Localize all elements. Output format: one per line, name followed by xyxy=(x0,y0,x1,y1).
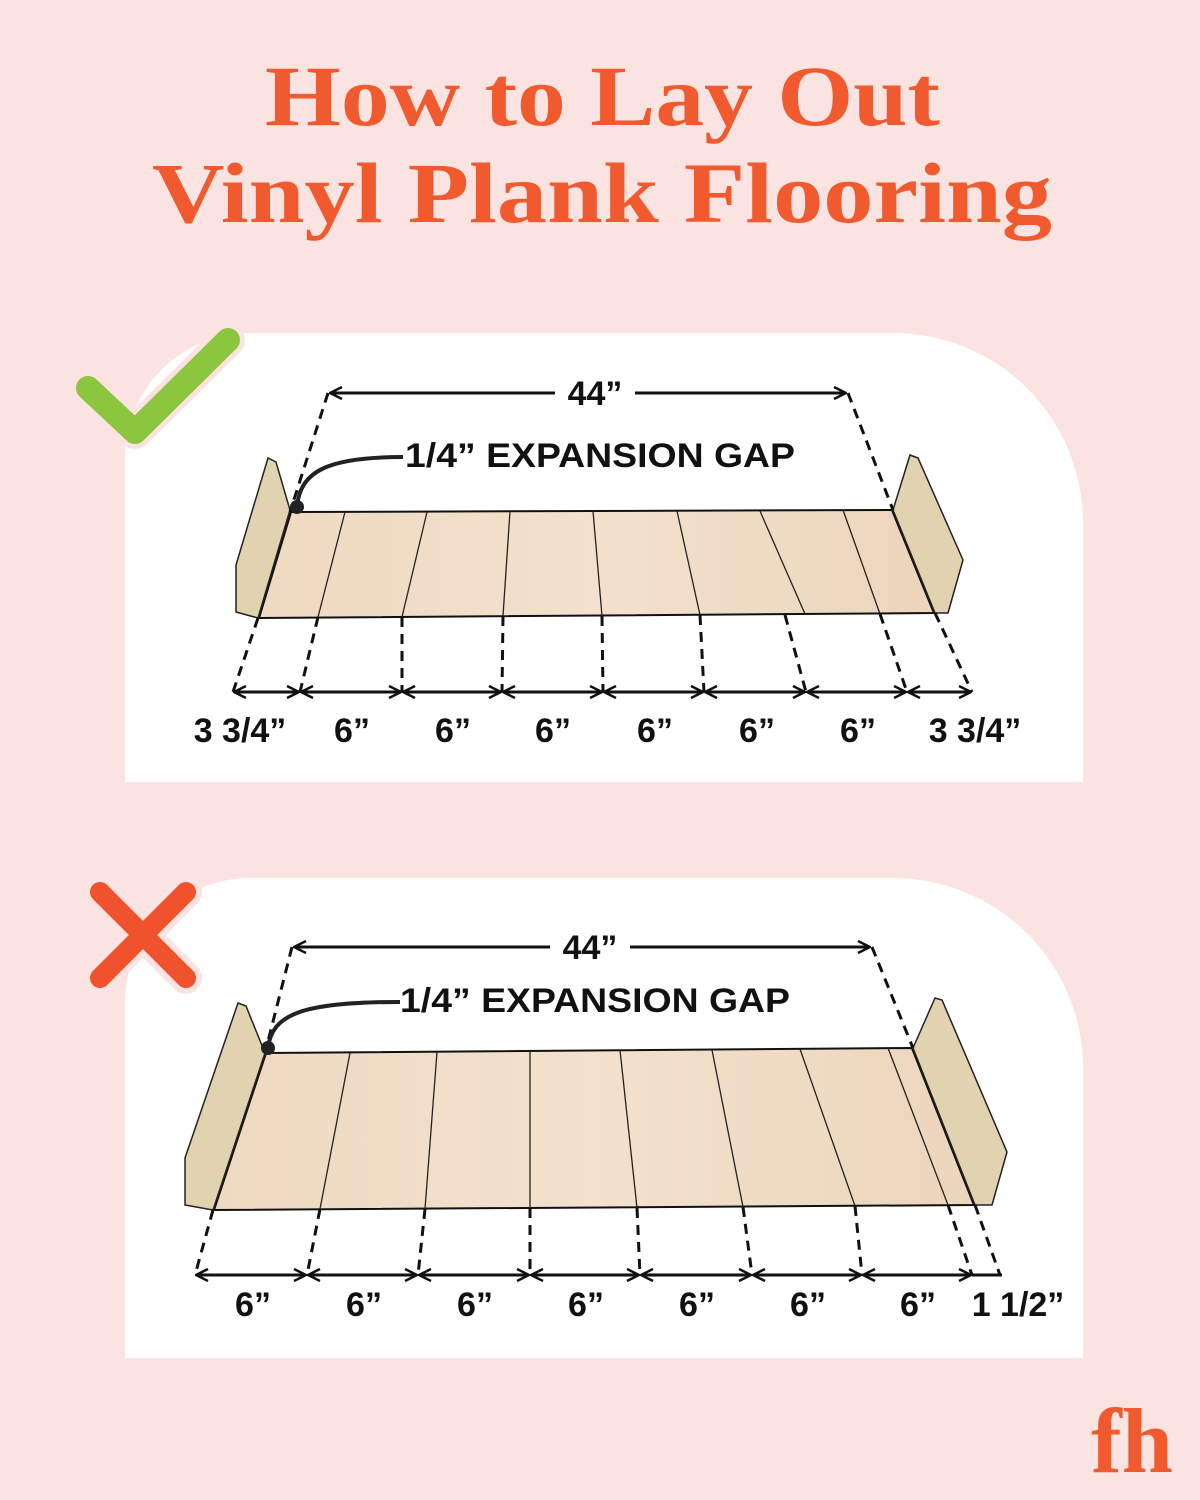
title: How to Lay Out xyxy=(265,48,940,144)
baseboard left xyxy=(185,1003,265,1210)
dimension 44: 44” xyxy=(568,375,622,413)
bottom dimensions: 3 3/4” xyxy=(929,712,1021,750)
bottom dimensions xyxy=(195,1205,1064,1324)
bottom dimensions: 3 3/4” xyxy=(194,712,286,750)
dimension 44: 44” xyxy=(563,929,617,967)
bottom dimensions: 6” xyxy=(457,1286,493,1324)
icon: X mark xyxy=(100,892,186,978)
bottom dimensions xyxy=(194,613,1021,750)
bottom dimensions: 6” xyxy=(334,712,370,750)
bottom dimensions: 6” xyxy=(790,1286,826,1324)
icon: check mark xyxy=(88,340,228,432)
expansion gap callout xyxy=(290,437,795,514)
bottom dimensions: 6” xyxy=(679,1286,715,1324)
bottom dimensions: 6” xyxy=(235,1286,271,1324)
dimension 44 xyxy=(265,929,913,1053)
panel: correct layout xyxy=(125,333,1083,782)
bottom dimensions: 6” xyxy=(568,1286,604,1324)
bottom dimensions: 6” xyxy=(840,712,876,750)
logo: fh: fh xyxy=(1091,1390,1173,1492)
bottom dimensions: 1 1/2” xyxy=(972,1286,1064,1324)
baseboard right xyxy=(893,455,963,613)
bottom dimensions: 6” xyxy=(346,1286,382,1324)
panel: wrong layout xyxy=(125,878,1083,1358)
bottom dimensions: 6” xyxy=(637,712,673,750)
bottom dimensions: 6” xyxy=(435,712,471,750)
expansion gap callout: 1/4” EXPANSION GAP xyxy=(400,982,790,1020)
expansion gap callout xyxy=(261,982,790,1055)
dimension 44 xyxy=(290,375,893,512)
bottom dimensions: 6” xyxy=(535,712,571,750)
bottom dimensions: 6” xyxy=(739,712,775,750)
baseboard right xyxy=(913,998,1007,1205)
floor planks xyxy=(213,1048,975,1210)
title xyxy=(152,48,1052,241)
floor planks xyxy=(258,510,935,618)
bottom dimensions: 6” xyxy=(900,1286,936,1324)
title: Vinyl Plank Flooring xyxy=(152,145,1052,241)
baseboard left xyxy=(236,458,290,618)
expansion gap callout: 1/4” EXPANSION GAP xyxy=(405,437,795,475)
